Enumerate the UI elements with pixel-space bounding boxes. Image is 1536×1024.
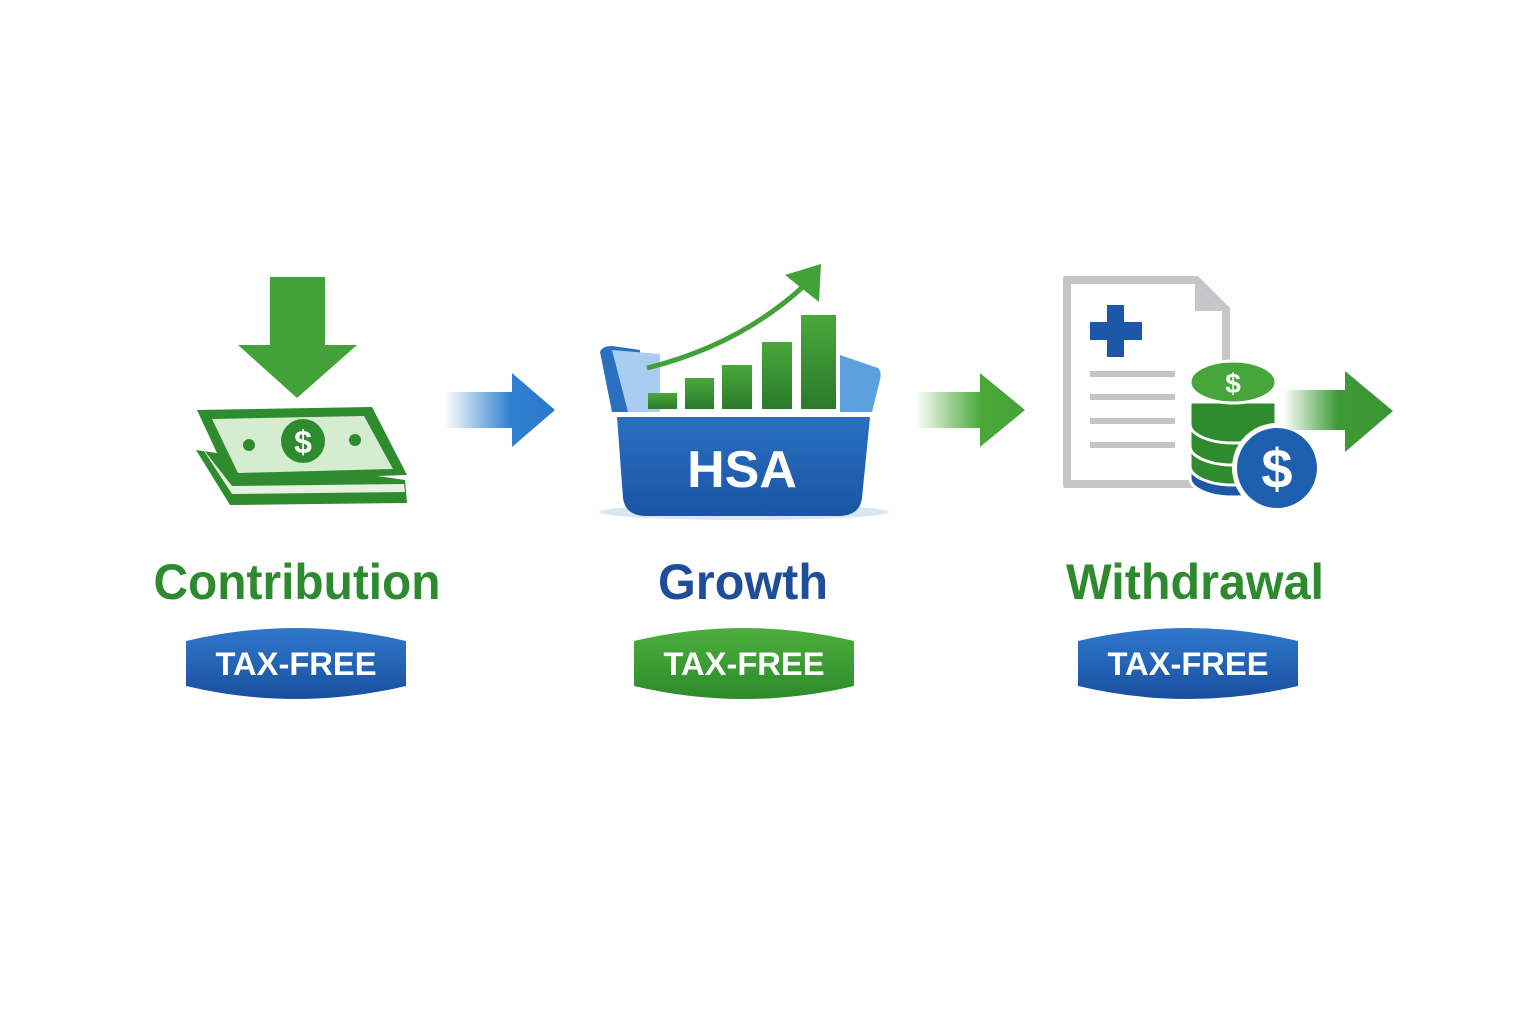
coin stack [1190,361,1276,497]
heading: Contribution: Contribution [154,554,440,610]
badge: contribution tax-free [186,628,406,699]
arrow: contribution to growth [445,373,555,447]
icon: contribution money with down arrow [196,277,407,505]
arrow: growth to withdrawal [915,373,1025,447]
icon: medical bill with coins: $ [1225,368,1241,399]
heading: Growth: Growth [658,554,828,610]
icon: HSA basket with growth chart [599,264,889,520]
badge: growth tax-free: TAX-FREE [664,646,824,682]
badge: growth tax-free [634,628,854,699]
badge: withdrawal tax-free: TAX-FREE [1108,646,1268,682]
icon: contribution money with down arrow: $ [294,424,312,460]
icon: medical bill with coins: $ [1261,437,1293,500]
heading: Withdrawal: Withdrawal [1066,554,1324,610]
badge: withdrawal tax-free [1078,628,1298,699]
badge: contribution tax-free: TAX-FREE [216,646,376,682]
icon: blue cross [1090,305,1142,357]
icon: HSA basket with growth chart: HSA [687,441,797,499]
icon: medical bill with coins [1063,276,1322,513]
arrow: withdrawal out [1283,371,1393,452]
